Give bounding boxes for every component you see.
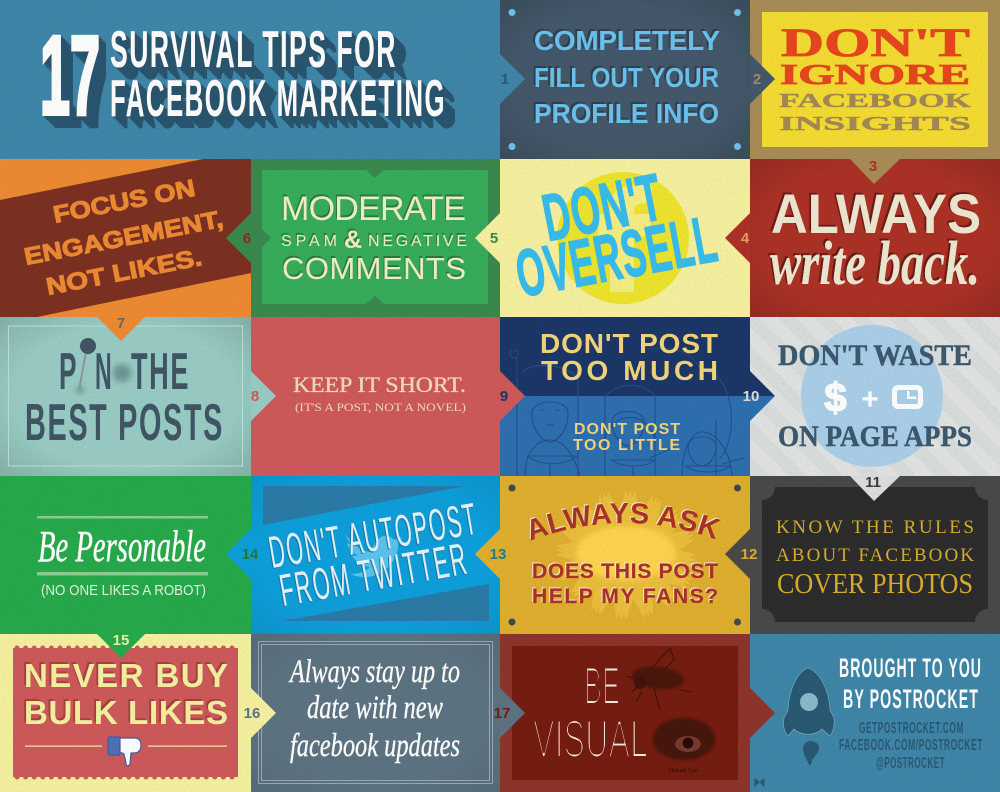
arrow 16 <box>244 688 276 738</box>
text: always ask: ALWAYS ASK <box>530 502 721 540</box>
text: moderate spam and negative comments: SPAM <box>281 233 337 250</box>
arrow 5 <box>475 213 500 263</box>
arrow 3: 3 <box>869 158 877 175</box>
text: never buy bulk likes <box>24 657 228 731</box>
arrow 11: 11 <box>865 474 881 491</box>
text: moderate spam and negative comments: NEGATIVE <box>368 233 467 250</box>
text: pin the best posts <box>25 343 224 452</box>
illustration: bee <box>626 648 692 710</box>
arrow 6 <box>226 213 251 263</box>
text: completely fill out your profile info: COMPLETELY <box>534 25 720 56</box>
text: keep it short: KEEP IT SHORT. <box>293 372 466 397</box>
text: focus on engagement not likes <box>22 175 225 301</box>
panel: tip 15 never buy bulk likes <box>0 634 251 792</box>
text: don't waste: DON'T WASTE <box>778 339 972 372</box>
text: always stay up to date with new facebook updates <box>289 654 460 764</box>
icon: thumbs down <box>108 737 141 766</box>
text: never buy bulk likes: NEVER BUY <box>24 657 228 694</box>
panel: tip 6 focus on engagement <box>0 159 251 317</box>
arrow 9 <box>500 371 525 421</box>
arrow 7: 7 <box>117 315 125 332</box>
icon: rocket <box>784 668 834 765</box>
text: focus on engagement not likes: NOT LIKES. <box>44 244 204 301</box>
icon: pin <box>79 338 96 390</box>
text: don't post too much: TOO MUCH <box>541 355 718 386</box>
text: know the rules about facebook cover photos: COVER PHOTOS <box>777 569 973 600</box>
screw dots <box>508 9 741 150</box>
text: pin the best posts: P <box>59 343 78 401</box>
arrow 7 <box>97 315 145 341</box>
text: moderate spam and negative comments <box>281 190 467 286</box>
text: completely fill out your profile info: PROFILE INFO <box>534 98 719 129</box>
icons: money plus time: + <box>861 383 879 416</box>
text: completely fill out your profile info: FILL OUT YOUR <box>534 62 719 93</box>
panel: tip 8 keep it short <box>251 317 500 476</box>
screw dots <box>508 484 741 626</box>
arrow 8: 8 <box>251 388 259 405</box>
text: be visual: VISUAL <box>533 710 648 769</box>
text: facebook insights: INSIGHTS <box>779 113 971 135</box>
panel: title <box>0 0 500 159</box>
heading: survival tips for: SURVIVAL TIPS FOR <box>110 21 397 79</box>
arrow 15: 15 <box>113 632 129 649</box>
text: be visual: BE <box>584 657 620 716</box>
text: always stay up to date with new facebook updates: facebook updates <box>290 728 460 764</box>
panel: tip 16 stay up to date <box>251 634 500 792</box>
text: it's a post not a novel: (IT'S A POST, NOT A NOVEL) <box>295 400 466 414</box>
panel: tip 7 pin the best posts <box>0 317 251 476</box>
arrow 6: 6 <box>243 230 251 247</box>
text: brought to you by postrocket <box>839 653 982 714</box>
arrow 10: 10 <box>743 388 759 405</box>
panel: tip 9 don't post too much or too little <box>500 317 750 476</box>
icons: money plus time <box>824 376 923 420</box>
panel: tip 1 complete profile <box>500 0 750 159</box>
arrow 4 <box>725 213 750 263</box>
panel: tip 12 always ask <box>500 476 750 634</box>
text: don't oversell: OVERSELL <box>510 201 723 311</box>
text: don't post too little: TOO LITTLE <box>573 437 680 454</box>
arrow 13 <box>475 529 506 579</box>
text: moderate spam and negative comments: & <box>344 226 362 254</box>
panel: tip 11 cover photo rules <box>750 476 1000 634</box>
arrow 2: 2 <box>753 71 761 88</box>
text: be personable: Be Personable <box>38 522 206 571</box>
text: know the rules about facebook cover photos: ABOUT FACEBOOK <box>776 545 974 566</box>
arrow 13: 13 <box>490 546 506 563</box>
text: don't oversell <box>510 159 723 311</box>
text: don't post too little: DON'T POST <box>574 421 680 438</box>
panel: title: FACEBOOK MARKETING <box>110 70 446 128</box>
icon: bow tie <box>755 779 764 786</box>
arrow 1: 1 <box>501 71 509 88</box>
arrow 14 <box>226 529 259 579</box>
arrow 18 <box>750 688 775 738</box>
panel: tip 10 don't waste on page apps <box>750 317 1000 476</box>
arrow 17: 17 <box>494 705 510 722</box>
text: don't post too little <box>573 421 680 454</box>
text: pin the best posts: THE <box>131 343 190 401</box>
icons: money plus time: $ <box>824 376 847 420</box>
text: always stay up to date with new facebook updates: Always stay up to <box>289 654 460 690</box>
arrow 2 <box>750 54 775 104</box>
text: does this post help my fans: HELP MY FANS? <box>532 585 718 608</box>
starburst <box>547 481 705 629</box>
panel: tip 2 insights <box>750 0 1000 159</box>
text: don't post too much: DON'T POST <box>540 328 718 359</box>
text: pin the best posts: N <box>95 343 113 401</box>
arrow 9: 9 <box>500 388 508 405</box>
text: links <box>839 720 983 772</box>
illustration: three bears <box>510 350 744 476</box>
text: don't autopost from twitter: FROM TWITTER <box>276 533 472 616</box>
text: don't ignore: DON'T <box>781 20 970 65</box>
panel: tip 4 don't oversell <box>500 159 750 317</box>
illustration: eye: Human Eye. <box>669 768 699 774</box>
panel: tip 5 moderate <box>251 159 500 317</box>
text: no one likes a robot: (NO ONE LIKES A ROBOT) <box>41 583 206 599</box>
text: does this post help my fans: DOES THIS POST <box>532 560 718 583</box>
pin shadow <box>76 364 131 394</box>
arrow 5: 5 <box>490 230 498 247</box>
illustration: eye <box>653 718 715 774</box>
text: be visual <box>533 657 648 769</box>
icon: facebook circle <box>557 172 689 304</box>
panel: tip 13 don't autopost: DON'T AUTOPOST <box>265 493 482 578</box>
arrow 3 <box>850 158 900 184</box>
text: on page apps: ON PAGE APPS <box>778 420 972 453</box>
panel: title: 17 <box>40 13 100 138</box>
text: facebook insights: FACEBOOK <box>779 90 972 112</box>
arrow 4: 4 <box>741 230 750 247</box>
panel: tip 13 don't autopost <box>251 476 500 634</box>
arrow 12: 12 <box>741 546 757 563</box>
text: don't ignore <box>780 20 970 91</box>
text: moderate spam and negative comments: MODERATE <box>281 190 466 228</box>
arrow 14: 14 <box>242 546 259 563</box>
text: facebook insights <box>779 90 972 135</box>
arrow 12 <box>725 529 757 579</box>
text: never buy bulk likes: BULK LIKES <box>24 694 228 731</box>
arrow 10 <box>743 371 775 421</box>
arrow 11 <box>850 474 900 501</box>
arrow 16: 16 <box>244 705 260 722</box>
arrow 8 <box>251 371 276 421</box>
text: don't post too much <box>540 328 718 386</box>
text: don't autopost from twitter <box>265 493 482 616</box>
arrow 1 <box>500 54 525 104</box>
panel: tip 3 always write back <box>750 159 1000 317</box>
text: moderate spam and negative comments: COMMENTS <box>282 251 466 286</box>
text: focus on engagement not likes: ENGAGEMENT, <box>22 206 225 271</box>
text: does this post help my fans <box>532 560 718 608</box>
panel: tip 17 be visual <box>500 634 750 792</box>
panel: tip 14 be personable <box>0 476 251 634</box>
text: don't oversell: DON'T <box>537 159 668 255</box>
arrow 17 <box>494 688 525 738</box>
panel: postrocket credit <box>750 634 1000 792</box>
text: always: ALWAYS <box>771 182 981 245</box>
icon: twitter bird <box>345 534 402 577</box>
arrow 15 <box>97 632 145 658</box>
text: always stay up to date with new facebook updates: date with new <box>307 690 443 726</box>
text: know the rules about facebook cover photos: KNOW THE RULES <box>776 517 974 538</box>
text: pin the best posts: BEST POSTS <box>25 394 224 452</box>
text: focus on engagement not likes: FOCUS ON <box>51 175 197 229</box>
text: completely fill out your profile info <box>534 25 720 129</box>
text: know the rules about facebook cover photos <box>776 517 974 600</box>
text: don't ignore: IGNORE <box>780 60 970 91</box>
